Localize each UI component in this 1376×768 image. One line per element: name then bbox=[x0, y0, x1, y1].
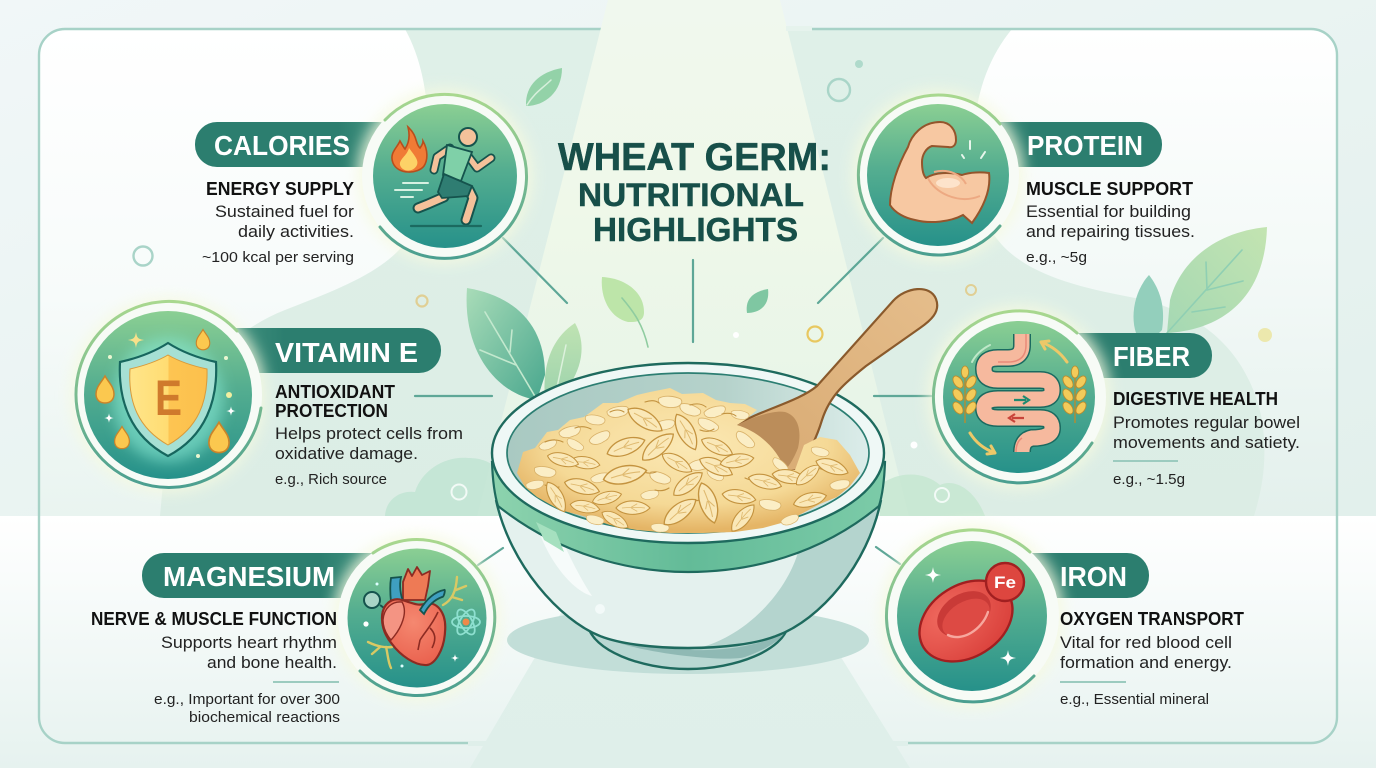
text: magnesium: NERVE & MUSCLE FUNCTION bbox=[91, 609, 337, 629]
pill: iron: IRON bbox=[1060, 561, 1127, 592]
text: vitamin e: Helps protect cells from bbox=[275, 424, 463, 443]
text: calories: ~100 kcal per serving bbox=[202, 250, 354, 266]
icon: heart bbox=[333, 534, 501, 702]
pill: magnesium: MAGNESIUM bbox=[163, 561, 335, 592]
text: protein: Essential for building bbox=[1026, 202, 1191, 221]
leaf: pale center bbox=[602, 277, 648, 347]
panel: vitamin e bbox=[70, 297, 463, 493]
text: vitamin e: ANTIOXIDANT bbox=[275, 382, 395, 402]
leaf: large right bbox=[1167, 227, 1267, 333]
leaf: teal right bbox=[1134, 275, 1163, 345]
title bbox=[558, 136, 831, 248]
text: magnesium: biochemical reactions bbox=[189, 710, 340, 726]
text: vitamin e: oxidative damage. bbox=[275, 444, 418, 463]
text: protein: e.g., ~5g bbox=[1026, 250, 1087, 266]
text: calories: ENERGY SUPPLY bbox=[206, 179, 354, 199]
text: calories: Sustained fuel for bbox=[215, 202, 354, 221]
pill: fiber bbox=[1010, 333, 1212, 378]
panel: fiber bbox=[927, 305, 1300, 489]
leaf: second behind bowl bbox=[544, 323, 582, 398]
shield bbox=[120, 343, 216, 456]
icon: flexed arm bbox=[852, 89, 1024, 261]
bowl with wheat germ and spoon bbox=[492, 289, 937, 674]
wheat sprigs bbox=[951, 366, 1088, 423]
leaf: large left bbox=[467, 288, 545, 400]
bowl inside bbox=[507, 373, 869, 533]
icon: red blood cell with Fe bbox=[880, 524, 1064, 708]
text: vitamin e: e.g., Rich source bbox=[275, 472, 387, 488]
flow arrows inside gut bbox=[1014, 396, 1029, 404]
text: fiber: movements and satiety. bbox=[1113, 433, 1300, 452]
text: magnesium bbox=[91, 609, 340, 726]
text: fiber bbox=[1113, 389, 1300, 488]
bowl highlight bbox=[595, 604, 605, 614]
icon: intestine and wheat bbox=[927, 305, 1111, 489]
text: iron: OXYGEN TRANSPORT bbox=[1060, 609, 1244, 629]
wheat germ pile bbox=[517, 388, 860, 535]
text: vitamin e: PROTECTION bbox=[275, 401, 388, 421]
icon: red blood cell with Fe: Fe bbox=[994, 573, 1016, 592]
bowl foot bbox=[588, 625, 788, 669]
small flakes bbox=[525, 395, 851, 533]
panel: protein bbox=[852, 89, 1195, 266]
circular arrows bbox=[1041, 341, 1067, 362]
spoon bbox=[737, 289, 937, 472]
text: fiber: DIGESTIVE HEALTH bbox=[1113, 389, 1278, 409]
icon: runner and flame bbox=[357, 88, 533, 264]
speed lines bbox=[395, 183, 428, 197]
pill: calories: CALORIES bbox=[214, 130, 350, 161]
nerve branches bbox=[368, 577, 466, 668]
pill: vitamin e bbox=[200, 328, 441, 373]
pill: protein: PROTEIN bbox=[1027, 130, 1143, 161]
panel: iron bbox=[880, 524, 1244, 708]
text: iron bbox=[1060, 609, 1244, 708]
flame bbox=[392, 127, 427, 172]
pill: fiber: FIBER bbox=[1113, 341, 1190, 372]
text: protein bbox=[1026, 179, 1195, 266]
cloud shapes behind bowl bbox=[385, 458, 985, 516]
text: magnesium: and bone health. bbox=[207, 653, 337, 672]
card tinted panel bbox=[39, 29, 1337, 516]
bowl colored band bbox=[492, 462, 885, 572]
panel: calories bbox=[195, 88, 533, 266]
title: NUTRITIONAL bbox=[578, 177, 804, 213]
text: calories: daily activities. bbox=[238, 222, 354, 241]
text: iron: e.g., Essential mineral bbox=[1060, 692, 1209, 708]
pill: magnesium bbox=[142, 553, 397, 598]
vessels bbox=[403, 567, 430, 600]
sparkles bbox=[128, 332, 144, 348]
runner bbox=[418, 148, 491, 220]
decorative leaves bbox=[467, 68, 1267, 400]
text: fiber: Promotes regular bowel bbox=[1113, 413, 1300, 432]
decorative circles and dots bbox=[134, 60, 1272, 502]
text: protein: and repairing tissues. bbox=[1026, 222, 1195, 241]
bowl shadow bbox=[507, 606, 869, 674]
text: calories bbox=[202, 179, 354, 266]
text: protein: MUSCLE SUPPORT bbox=[1026, 179, 1193, 199]
text: magnesium: e.g., Important for over 300 bbox=[154, 692, 340, 708]
text: magnesium: Supports heart rhythm bbox=[161, 633, 337, 652]
oil drops bbox=[196, 330, 210, 350]
connector lines bbox=[415, 238, 931, 565]
pill: iron bbox=[980, 553, 1149, 598]
icon: shield with E and oil drops bbox=[70, 297, 266, 493]
text: iron: Vital for red blood cell bbox=[1060, 633, 1232, 652]
bowl body bbox=[496, 500, 881, 650]
leaf: top small bbox=[526, 68, 562, 106]
bowl rim bbox=[492, 363, 884, 543]
pill: protein bbox=[960, 122, 1162, 167]
title: WHEAT GERM: bbox=[558, 136, 831, 179]
pill: calories bbox=[195, 122, 400, 167]
atom bbox=[452, 607, 480, 637]
panel: magnesium bbox=[91, 534, 501, 726]
text: vitamin e bbox=[275, 382, 463, 488]
stethoscope probe bbox=[380, 605, 384, 608]
leaf: small right of center bbox=[747, 289, 768, 313]
text: fiber: e.g., ~1.5g bbox=[1113, 472, 1185, 488]
title: HIGHLIGHTS bbox=[593, 211, 798, 248]
icon: shield with E and oil drops: E bbox=[155, 370, 182, 426]
heart body bbox=[382, 599, 445, 665]
light beam bbox=[468, 0, 910, 768]
pill: vitamin e: VITAMIN E bbox=[275, 337, 418, 368]
text: iron: formation and energy. bbox=[1060, 653, 1232, 672]
